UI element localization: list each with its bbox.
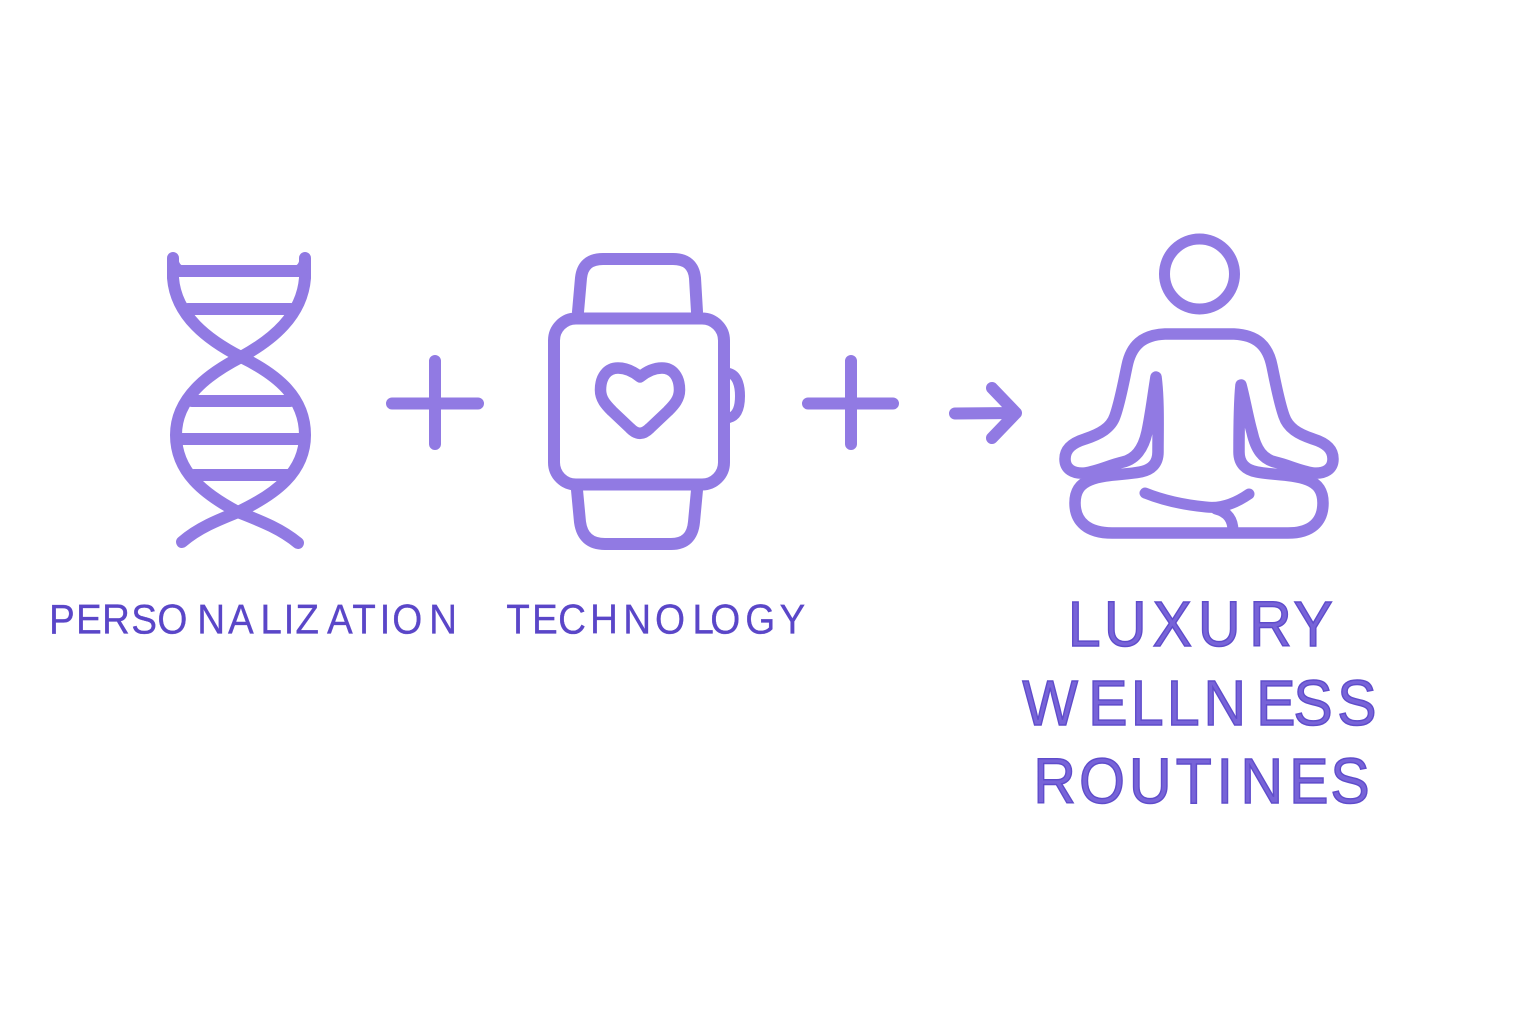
icon: meditating person bbox=[1065, 239, 1333, 533]
label: technology: TECHNOLOGY bbox=[506, 595, 805, 643]
icon: plus between technology and result bbox=[808, 361, 893, 444]
icon: arrow bbox=[955, 388, 1016, 438]
heading: luxury wellness routines: ROUTINES bbox=[1033, 746, 1370, 818]
heading: luxury wellness routines: LUXURY bbox=[1068, 589, 1333, 661]
icon: DNA helix bbox=[173, 258, 305, 543]
label: personalization: PERSONALIZATION bbox=[49, 595, 457, 643]
heading: luxury wellness routines: WELLNESS bbox=[1022, 668, 1377, 740]
heading: luxury wellness routines bbox=[1022, 589, 1377, 818]
icon: smartwatch with heart bbox=[554, 259, 740, 544]
icon: plus between personalization and technology bbox=[392, 361, 478, 444]
